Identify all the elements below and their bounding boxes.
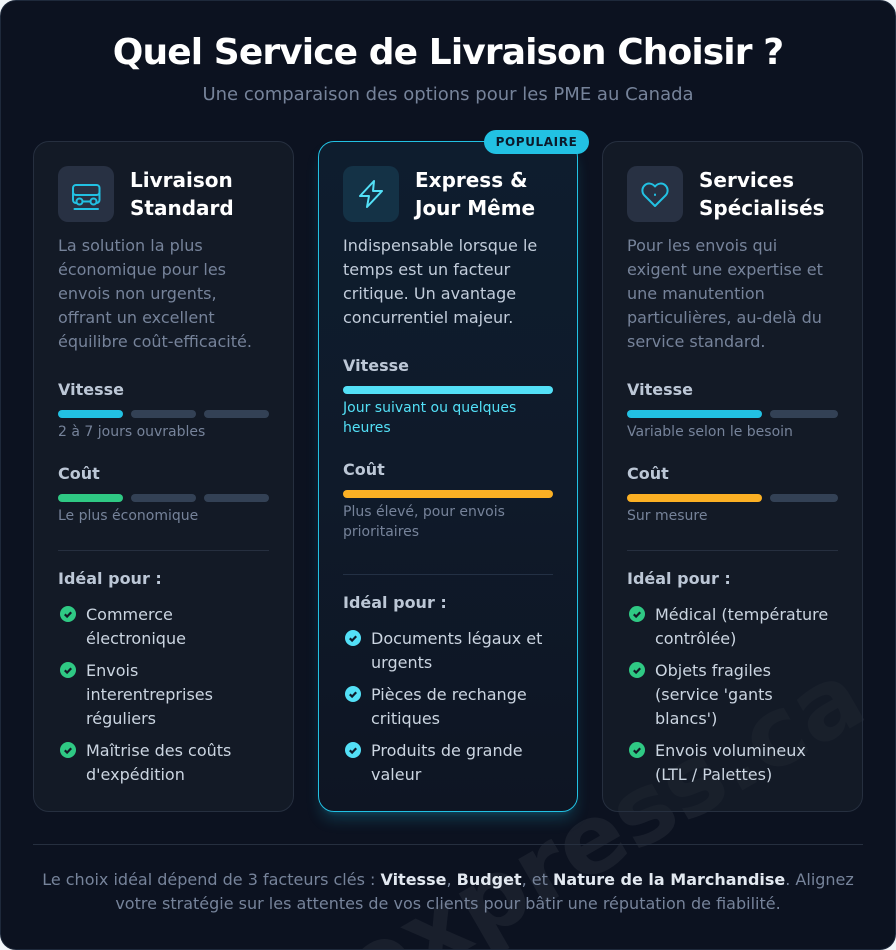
cost caption xyxy=(343,504,505,540)
heading xyxy=(699,168,825,220)
list item xyxy=(629,605,828,648)
footer text xyxy=(42,870,854,913)
heading: Services xyxy=(699,168,794,192)
description: service standard. xyxy=(627,332,765,351)
speed bar xyxy=(58,410,269,418)
list item: d'expédition xyxy=(86,765,185,784)
description: particulières, au-delà du xyxy=(627,308,822,327)
speed caption: heures xyxy=(343,420,391,436)
cost label: Coût xyxy=(343,460,385,479)
cost label: Coût xyxy=(627,464,669,483)
list item: valeur xyxy=(371,765,421,784)
cost caption: Le plus économique xyxy=(58,508,198,524)
description: envois non urgents, xyxy=(58,284,217,303)
panel: Livraison Standard xyxy=(33,141,294,812)
description xyxy=(58,236,252,351)
description xyxy=(343,236,537,327)
footer text: Le choix idéal dépend de 3 facteurs clés : Vitesse, Budget, et Nature de la Marchandise. Alignez xyxy=(42,870,854,889)
heading: Express & xyxy=(415,168,528,192)
list item xyxy=(629,661,773,728)
ideal heading: Idéal pour : xyxy=(58,569,162,588)
list item: critiques xyxy=(371,709,440,728)
icon: truck xyxy=(58,166,114,222)
description: exigent une expertise et xyxy=(627,260,823,279)
title: Quel Service de Livraison Choisir ? xyxy=(113,32,783,73)
description: économique pour les xyxy=(58,260,226,279)
subtitle: Une comparaison des options pour les PME au Canada xyxy=(202,84,694,105)
list item: Envois xyxy=(86,661,138,680)
list item xyxy=(345,629,542,672)
icon: lightning xyxy=(343,166,399,222)
cost bar xyxy=(58,494,269,502)
list item xyxy=(60,661,213,728)
icon: heart xyxy=(627,166,683,222)
list item: blancs') xyxy=(655,709,717,728)
cost label: Coût xyxy=(58,464,100,483)
cost caption: Plus élevé, pour envois xyxy=(343,504,505,520)
heading: Livraison xyxy=(130,168,233,192)
footer text: votre stratégie sur les attentes de vos clients pour bâtir une réputation de fiabilité. xyxy=(115,894,781,913)
panel: Express & Jour Même xyxy=(318,141,578,812)
heading: Jour Même xyxy=(415,196,535,220)
description: une manutention xyxy=(627,284,765,303)
list item: Documents légaux et xyxy=(371,629,542,648)
description: équilibre coût-efficacité. xyxy=(58,332,252,351)
description: critique. Un avantage xyxy=(343,284,516,303)
list item: électronique xyxy=(86,629,186,648)
list item xyxy=(345,741,523,784)
description: Pour les envois qui xyxy=(627,236,777,255)
description: La solution la plus xyxy=(58,236,203,255)
panel: Services Spécialisés xyxy=(602,141,863,812)
list item: Maîtrise des coûts xyxy=(86,741,231,760)
badge: populaire xyxy=(484,130,589,154)
list item: Produits de grande xyxy=(371,741,523,760)
heading xyxy=(414,168,535,220)
list item xyxy=(60,741,231,784)
speed bar xyxy=(627,410,838,418)
list item: réguliers xyxy=(86,709,156,728)
list item xyxy=(629,741,806,784)
cost bar xyxy=(627,494,838,502)
speed label: Vitesse xyxy=(627,380,693,399)
cost caption: Sur mesure xyxy=(627,508,707,524)
list item: (service 'gants xyxy=(655,685,773,704)
heading: Standard xyxy=(130,196,234,220)
list item: Commerce xyxy=(86,605,173,624)
list item xyxy=(345,685,527,728)
speed label: Vitesse xyxy=(58,380,124,399)
ideal heading: Idéal pour : xyxy=(627,569,731,588)
ideal heading: Idéal pour : xyxy=(343,593,447,612)
speed caption: Jour suivant ou quelques xyxy=(343,400,516,416)
description xyxy=(627,236,823,351)
list item: Objets fragiles xyxy=(655,661,771,680)
speed caption: Variable selon le besoin xyxy=(627,424,793,440)
description: offrant un excellent xyxy=(58,308,215,327)
list item: Envois volumineux xyxy=(655,741,806,760)
description: Indispensable lorsque le xyxy=(343,236,537,255)
cost caption: prioritaires xyxy=(343,524,419,540)
speed caption xyxy=(342,400,516,436)
heading: Spécialisés xyxy=(699,196,825,220)
cost bar xyxy=(343,490,553,498)
list item: contrôlée) xyxy=(655,629,736,648)
speed caption: 2 à 7 jours ouvrables xyxy=(58,424,205,440)
speed bar xyxy=(343,386,553,394)
list item: Pièces de rechange xyxy=(371,685,527,704)
badge: populaire: POPULAIRE xyxy=(496,135,577,149)
list item: urgents xyxy=(371,653,432,672)
speed label: Vitesse xyxy=(343,356,409,375)
list item: Médical (température xyxy=(655,605,828,624)
list item: (LTL / Palettes) xyxy=(655,765,772,784)
description: concurrentiel majeur. xyxy=(343,308,513,327)
description: temps est un facteur xyxy=(343,260,510,279)
heading xyxy=(130,168,234,220)
list item: interentreprises xyxy=(86,685,213,704)
list item xyxy=(60,605,186,648)
